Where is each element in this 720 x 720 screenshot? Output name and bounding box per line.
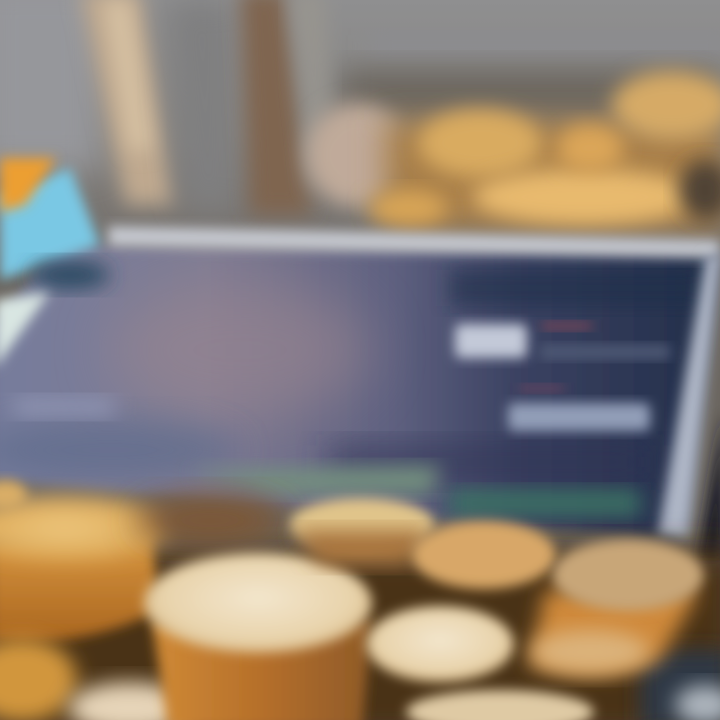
coin shadows <box>0 550 720 720</box>
screen top frame <box>108 226 720 258</box>
left lower tint <box>0 420 240 480</box>
vertical pillars <box>80 0 330 215</box>
coins <box>0 480 720 720</box>
white corner <box>675 685 720 720</box>
coin bottom right <box>406 690 594 720</box>
screen right frame <box>658 255 720 540</box>
dark top band <box>450 270 700 306</box>
coin stack right <box>530 590 700 674</box>
coin cream <box>366 606 514 682</box>
coin lower left <box>0 638 77 720</box>
coin upper centre <box>290 498 434 550</box>
coin centre right <box>412 521 556 589</box>
background wall <box>0 0 720 270</box>
card shadow <box>30 261 110 289</box>
blue card <box>0 158 110 368</box>
screen glow <box>110 280 370 420</box>
basket <box>306 103 410 207</box>
right edge dark <box>698 410 720 560</box>
blurred screen text <box>14 322 670 431</box>
coin large centre <box>152 620 372 720</box>
coin bottom <box>68 682 192 720</box>
screen panel <box>0 245 720 540</box>
lower dark band <box>330 445 650 479</box>
cookies top right <box>368 71 720 230</box>
orange card corner <box>0 158 56 212</box>
white paper corner <box>0 292 50 368</box>
coin stack left <box>0 525 160 642</box>
green chart strip <box>190 466 640 516</box>
